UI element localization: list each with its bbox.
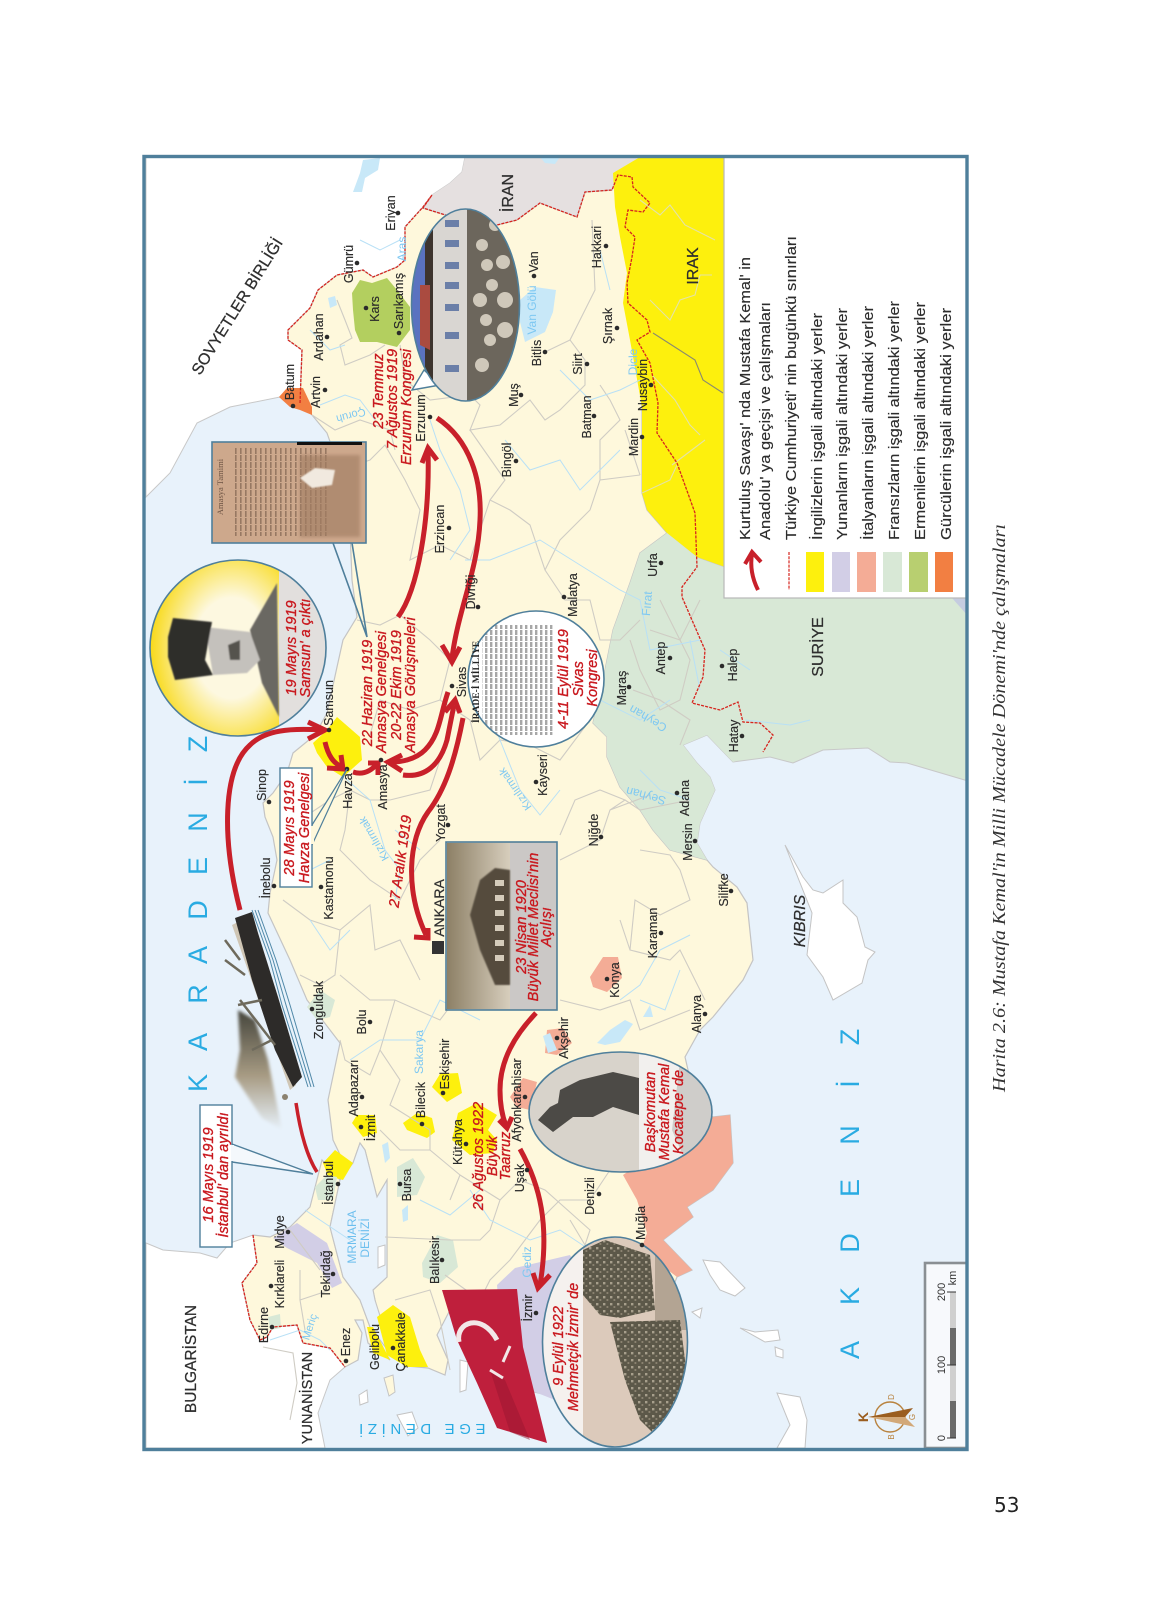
city: Samsun: Samsun [322, 680, 336, 726]
caption: Samsun [284, 599, 314, 697]
legend text: Ermenilerin işgali altındaki yerler [912, 302, 929, 540]
callout: Istanbul departure box [200, 1105, 313, 1247]
photo: Turkish flag [442, 1289, 547, 1443]
map panel [143, 157, 969, 1450]
sea background [146, 398, 966, 1448]
city: Sinop: Sinop [255, 769, 269, 801]
caption: Izmir [551, 1283, 582, 1411]
city: Bilecik: Bilecik [414, 1081, 428, 1118]
labels: seas: E [835, 1179, 865, 1197]
city: Hakkari: Hakkari [590, 226, 604, 268]
city: Bingol: Bingöl [500, 443, 514, 477]
labels: rivers: Aras [395, 237, 409, 261]
city: Mugla: Muğla [634, 1206, 648, 1240]
legend text: Gürcülerin işgali altındaki yerler [938, 308, 955, 540]
caption: Great Offensive: 26 Ağustos 1922 [471, 1102, 487, 1211]
legend arrow icon [745, 552, 761, 590]
city: Kars: Kars [368, 296, 382, 322]
city: Mersin: Mersin [681, 823, 695, 861]
labels: seas: A [183, 1033, 213, 1051]
compass: B [887, 1434, 896, 1440]
city: Balikesir: Balıkesir [428, 1236, 442, 1284]
city: Batman: Batman [580, 395, 594, 439]
city: Izmit: İzmit [364, 1114, 378, 1141]
lakes and islands [328, 157, 875, 1448]
scale bar: km [947, 1271, 959, 1285]
caption: Amasya: 22 Haziran 1919 [360, 640, 376, 747]
labels: countries: YUNANİSTAN [298, 1352, 316, 1444]
region: Italian occupied southwest [623, 1115, 733, 1277]
city: Kayseri: Kayseri [536, 754, 550, 796]
caption: Great Offensive: Büyük [485, 1135, 501, 1176]
region: French occupied south [593, 533, 736, 860]
arrow: Sivas to Amasya [388, 692, 448, 771]
labels: countries: KIBRIS [792, 894, 809, 947]
labels: rivers: Kızılırmak [357, 814, 392, 863]
city: Edirne: Edirne [257, 1307, 271, 1343]
photo: Sivas Congress newspaper: İRADE-İ MİLLİYE [470, 641, 482, 723]
labels: countries: SURİYE [808, 617, 827, 677]
city: Urfa: Urfa [646, 553, 660, 577]
city: Tekirdag: Tekirdağ [319, 1250, 333, 1298]
legend text [737, 236, 955, 540]
labels: rivers: Fırat [639, 590, 655, 617]
city: Bitlis: Bitlis [530, 340, 544, 366]
labels: rivers [300, 237, 669, 1342]
border: Thrace [242, 1235, 345, 1367]
city: Van: Van [527, 251, 541, 273]
legend swatches [806, 552, 953, 592]
caption: Sivas Congress [556, 629, 601, 729]
photo: Izmir [542, 1235, 690, 1450]
callout: Havza circular box: 28 Mayıs 1919 [282, 780, 298, 877]
caption: Amasya: Amasya Genelgesi [374, 630, 390, 754]
city: Batum: Batum [283, 364, 297, 400]
labels: seas: MRMARA [345, 1210, 359, 1264]
scale bar [925, 1263, 967, 1448]
caption: Samsun: Samsun' a çıktı [298, 599, 314, 697]
legend border sample [788, 552, 790, 590]
arrow: Ankara to Afyon [499, 1013, 536, 1128]
photo: Parliament building [446, 842, 557, 1010]
city: Izmir: İzmir [521, 1294, 535, 1322]
region: Syria French occupation [668, 534, 966, 860]
photo: Ataturk portrait circle [148, 558, 329, 738]
arrow: Amasya to Sivas [403, 700, 460, 775]
caption: Parliament [514, 853, 555, 1001]
legend text: Yunanların işgali altındaki yerler [834, 308, 851, 540]
caption: Erzurum Congress: 23 Temmuz [371, 353, 387, 430]
caption: Erzurum Congress: 7 Ağustos 1919 [385, 349, 401, 449]
arrow: to Samsun [228, 722, 325, 910]
region: Iraq British occupation [613, 157, 725, 567]
legend text: Kurtuluş Savaşı' nda Mustafa Kemal' in [737, 257, 754, 540]
city: Enez: Enez [339, 1328, 353, 1356]
city: Bolu: Bolu [355, 1009, 369, 1035]
city: Sivas: Sivas [455, 667, 469, 697]
caption: Sivas Congress: Kongresi [585, 649, 601, 707]
labels: seas: İ [182, 778, 213, 786]
labels: rivers: Gediz [520, 1246, 534, 1278]
border: Republic of Turkey [288, 175, 773, 752]
caption: Kocatepe [643, 1063, 687, 1160]
labels: rivers: Meriç [300, 1312, 320, 1342]
city: Sirnak: Şırnak [601, 307, 615, 344]
photo: Sivas Congress newspaper [468, 610, 604, 748]
arrow: Afyon to Izmir [520, 1149, 550, 1288]
city: Istanbul: İstanbul [322, 1161, 336, 1205]
city: Amasya: Amasya [376, 764, 390, 810]
labels: seas: İ [834, 1080, 865, 1088]
city: Eskisehir: Eskişehir [438, 1039, 452, 1089]
city: Canakkale: Çanakkale [394, 1312, 408, 1372]
arrow: Erzurum to Sivas [437, 418, 480, 662]
arrow: Amasya to Erzurum [398, 448, 437, 617]
labels: seas: N [183, 812, 213, 832]
arrow: Samsun to Havza [325, 742, 343, 769]
city: Hatay: Hatay [727, 719, 741, 752]
city: Gumru: Gümrü [342, 245, 356, 283]
city: Eriyan: Eriyan [384, 195, 398, 231]
arrow: Sivas to Ankara [412, 718, 463, 938]
compass: G [908, 1414, 917, 1420]
labels: seas: K [835, 1287, 865, 1305]
labels: rivers: Dicle [626, 348, 640, 375]
city: Karaman: Karaman [646, 908, 660, 958]
city: Mus: Muş [507, 383, 521, 407]
caption: Kocatepe: Kocatepe' de [671, 1070, 687, 1154]
labels: seas: D [183, 900, 213, 920]
land: Thrace [242, 1160, 390, 1367]
arrow: Istanbul departure [296, 1103, 317, 1172]
callout: Istanbul departure box: 16 Mayıs 1919 [201, 1127, 217, 1223]
caption: Amasya: Amasya Görüşmeleri [403, 617, 419, 754]
land: Anatolia [263, 175, 753, 1400]
city: Mardin: Mardin [627, 418, 641, 456]
occupation blobs [268, 278, 622, 1400]
city: Konya: Konya [608, 962, 622, 998]
caption: Parliament: Büyük Millet Meclisi'nin [526, 853, 542, 1001]
labels: rivers: Kızılırmak [496, 765, 534, 812]
compass: K [855, 1412, 871, 1422]
labels: countries: ANKARA [431, 879, 447, 937]
labels: seas: N [835, 1125, 865, 1145]
caption: Erzurum Congress: Erzurum Kongresi [399, 348, 415, 465]
city: Inebolu: İnebolu [259, 857, 273, 899]
city: Siirt: Siirt [571, 353, 585, 375]
labels: countries: İRAN [498, 174, 517, 212]
caption: Ankara arrival: 27 Aralık 1919 [387, 814, 415, 910]
labels: seas: K [183, 1074, 213, 1092]
caption: Erzurum Congress [371, 348, 415, 465]
city: Kutahya: Kütahya [451, 1119, 465, 1165]
labels: rivers: Seyhan [624, 784, 667, 808]
scale bar: 200 [936, 1283, 948, 1301]
city: Nusaybin: Nusaybin [636, 359, 650, 411]
map frame [144, 156, 967, 1450]
labels: rivers: Sakarya [412, 1030, 426, 1074]
photo: Amasya Circular document: Amasya Tamimi [215, 458, 225, 515]
photo: Kocatepe [528, 1050, 714, 1175]
caption: Great Offensive [471, 1102, 514, 1211]
photo: Erzurum Congress [410, 205, 522, 405]
caption: Izmir: Mehmetçik İzmir' de [565, 1283, 582, 1411]
city: Divrigi: Divriği [464, 575, 478, 609]
callout: Havza circular box: Havza Genelgesi [297, 772, 313, 883]
page number: 53 [994, 1493, 1019, 1517]
province boundaries [263, 200, 723, 1420]
city: Erzincan: Erzincan [433, 505, 447, 553]
marker: Ankara square [432, 941, 444, 954]
scale bar: 0 [936, 1435, 948, 1441]
city: Halep: Halep [726, 649, 740, 681]
city: Gelibolu: Gelibolu [368, 1324, 382, 1370]
city: Havza: Havza [341, 773, 355, 809]
city: Malatya: Malatya [566, 573, 580, 617]
city: Yozgat: Yozgat [434, 804, 448, 842]
caption: Samsun: 19 Mayıs 1919 [284, 600, 300, 696]
caption: Sivas Congress: 4-11 Eylül 1919 [556, 629, 572, 729]
photo: Bandirma ship [225, 910, 314, 1130]
city: Kastamonu: Kastamonu [322, 856, 336, 920]
labels: rivers: Van Gölü [525, 285, 539, 335]
region: Marmara Sea [330, 1142, 387, 1348]
labels: seas: A [835, 1341, 865, 1359]
city: Aksehir: Akşehir [557, 1017, 571, 1059]
city: Denizli: Denizli [583, 1177, 597, 1215]
labels: seas: EGE DENİZİ [354, 1420, 486, 1438]
city: Bursa: Bursa [400, 1169, 414, 1201]
labels: rivers: Ceyhan [627, 702, 669, 735]
figure caption: Harita 2.6: Mustafa Kemal'in Milli Mücadele Dönemi'nde çalışmaları [989, 524, 1009, 1093]
city: Kirklareli: Kırklareli [273, 1260, 287, 1308]
city: Adapazari: Adapazarı [347, 1060, 361, 1116]
scale bar: 100 [936, 1356, 948, 1374]
caption: Sivas Congress: Sivas [571, 661, 587, 697]
caption: Kocatepe: Başkomutan [643, 1072, 659, 1152]
labels: countries [182, 174, 827, 1444]
labels: seas: Z [183, 736, 213, 752]
caption: Amasya: 20-22 Ekim 1919 [389, 630, 405, 741]
labels: seas: A [183, 946, 213, 964]
city: Zonguldak: Zonguldak [312, 980, 326, 1039]
city: Midye: Midye [273, 1215, 287, 1249]
legend [724, 157, 968, 616]
labels: rivers: Çoruh [335, 405, 367, 425]
region: Balkans [146, 1235, 345, 1448]
city: Maras: Maraş [615, 671, 629, 705]
caption: Izmir: 9 Eylül 1922 [551, 1306, 567, 1386]
rivers [270, 240, 810, 1350]
callout: Havza circular box [280, 768, 347, 887]
legend text: İngilizlerin işgali altındaki yerler [808, 313, 826, 540]
labels: seas: DENİZİ [358, 1218, 372, 1258]
city: Halep [720, 649, 740, 681]
labels: countries: IRAK [685, 247, 702, 285]
labels: countries: BULGARİSTAN [182, 1305, 200, 1413]
city: Alanya: Alanya [690, 995, 704, 1033]
region: Iran [424, 158, 638, 224]
labels: seas: R [183, 984, 213, 1004]
legend text: Anadolu' ya geçişi ve çalışmaları [757, 302, 774, 540]
city: Erzurum: Erzurum [414, 394, 428, 442]
city: Adana: Adana [678, 780, 692, 816]
caption: Parliament: Açılışı [539, 907, 555, 948]
labels: seas: D [835, 1233, 865, 1253]
arrow: Havza to Amasya [353, 763, 378, 775]
city: Silifke: Silifke [717, 873, 731, 907]
city: Ardahan: Ardahan [312, 313, 326, 361]
callout: Istanbul departure box: İstanbul' dan ayrıldı [215, 1112, 232, 1238]
city: Usak: Uşak [513, 1163, 527, 1192]
legend text: İtalyanların işgali altındaki yerler [859, 306, 877, 540]
labels: seas [182, 736, 865, 1438]
labels: seas: E [183, 857, 213, 875]
legend text: Fransızların işgali altındaki yerler [886, 301, 903, 540]
compass [855, 1394, 917, 1440]
city: Nigde: Niğde [587, 814, 601, 846]
city: Antep: Antep [654, 642, 668, 674]
photo: Amasya Circular document [212, 442, 367, 637]
compass: D [887, 1394, 896, 1400]
legend text: Türkiye Cumhuriyeti' nin bugünkü sınırları [783, 236, 800, 540]
labels: seas: Z [835, 1029, 865, 1045]
region: Soviet Union [146, 157, 465, 497]
city: Afyonkarahisar: Afyonkarahisar [510, 1058, 524, 1142]
caption: Parliament: 23 Nisan 1920 [514, 880, 530, 975]
city: Sarikamis: Sarıkamış [392, 273, 406, 329]
city: Artvin: Artvin [309, 376, 323, 408]
caption: Great Offensive: Taarruz [498, 1131, 514, 1180]
caption: Kocatepe: Mustafa Kemal [657, 1063, 673, 1160]
labels: countries: SOVYETLER BİRLİĞİ [187, 235, 287, 378]
caption: Amasya [360, 617, 419, 754]
